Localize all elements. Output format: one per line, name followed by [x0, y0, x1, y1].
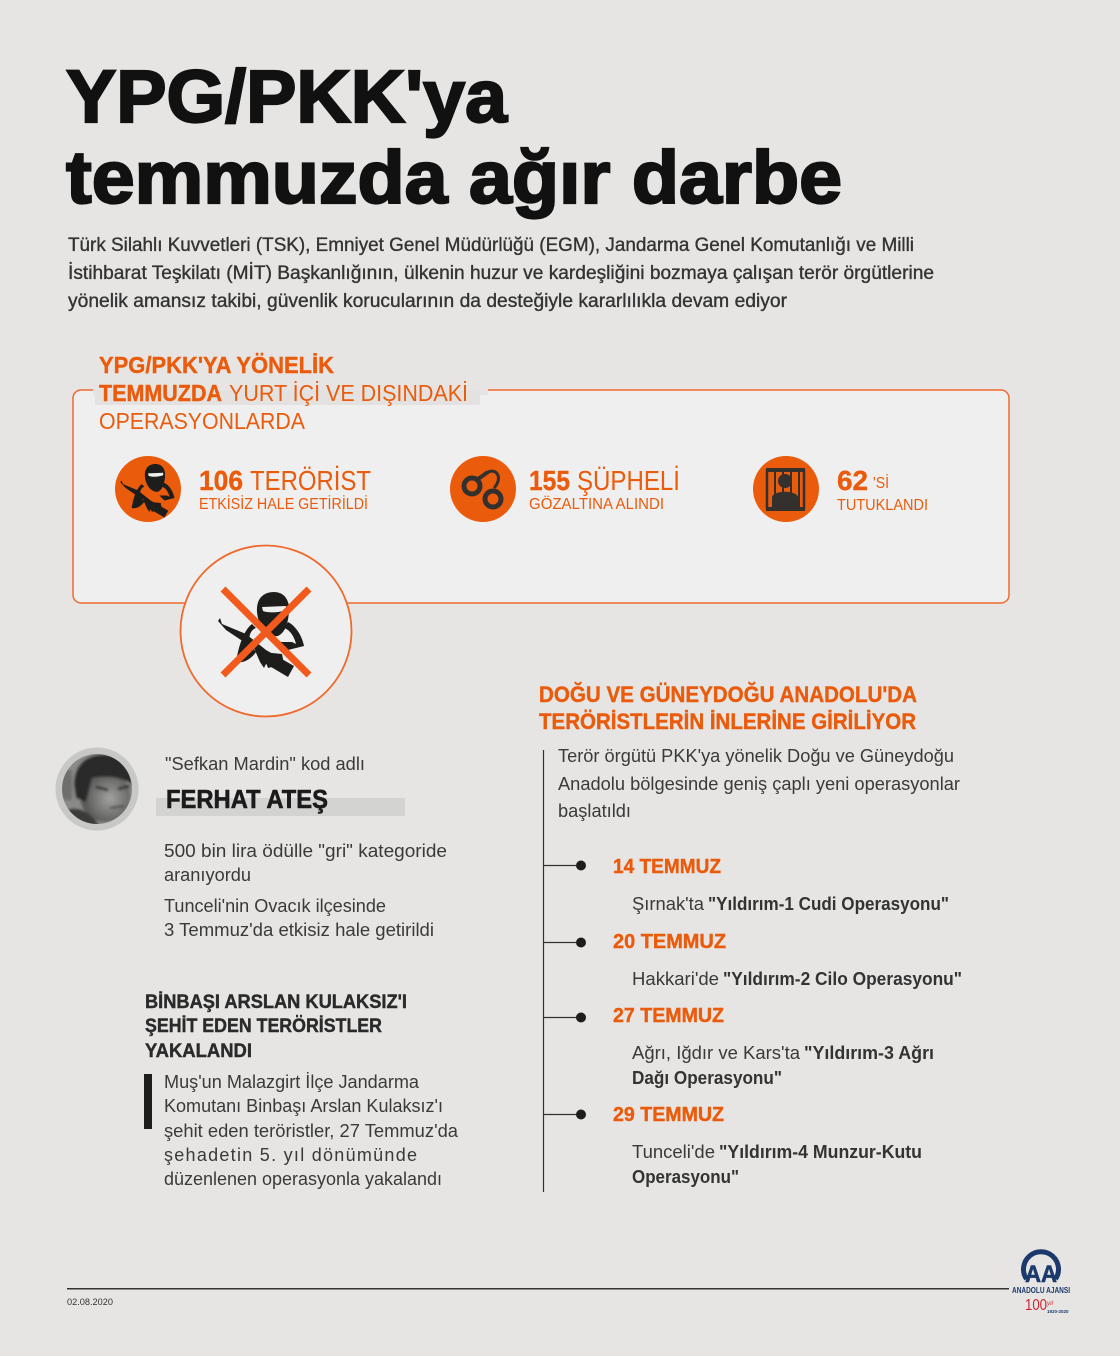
- heading: YAKALANDI: [145, 1041, 252, 1062]
- stat: 106 terrorists: TERÖRİST: [250, 465, 371, 496]
- intro text: [68, 235, 934, 312]
- entry: 29 Temmuz: [613, 1104, 922, 1187]
- title: YPG/PKK'ya: [66, 55, 508, 138]
- name with highlight bar: [156, 784, 405, 816]
- logo: Anadolu Ajansı: [1012, 1252, 1070, 1314]
- entry: 14 Temmuz: "Yıldırım-1 Cudi Operasyonu": [708, 894, 949, 914]
- intro text: İstihbarat Teşkilatı (MİT) Başkanlığının, ülkenin huzur ve kardeşliğini bozmaya çalışan terör örgütlerine: [68, 263, 934, 284]
- entry: 29 Temmuz: "Yıldırım-4 Munzur-Kutu: [719, 1142, 922, 1162]
- stat: 62 arrested: [837, 465, 928, 514]
- panel: Binbaşı Kulaksız: [144, 992, 459, 1189]
- date: 02.08.2020: [67, 1297, 113, 1307]
- entry: 20 Temmuz: [613, 931, 962, 989]
- body text: şehit eden teröristler, 27 Temmuz'da: [164, 1121, 459, 1141]
- entry: 20 Temmuz: Hakkari'de: [632, 969, 719, 989]
- logo: Anadolu Ajansı: 1920-2020: [1047, 1309, 1069, 1314]
- stat: 155 suspects: [529, 465, 680, 513]
- entry: 20 Temmuz: 20 TEMMUZ: [613, 931, 726, 953]
- entry: 29 Temmuz: 29 TEMMUZ: [613, 1104, 724, 1126]
- entry: 27 Temmuz: 27 TEMMUZ: [613, 1005, 724, 1027]
- title: [66, 55, 842, 219]
- alias label: "Sefkan Mardin" kod adlı: [165, 754, 365, 774]
- panel heading: YURT İÇİ VE DIŞINDAKİ: [229, 380, 468, 406]
- logo: Anadolu Ajansı: yıl: [1046, 1301, 1054, 1307]
- heading: [145, 992, 407, 1062]
- icon: handcuffs: [450, 456, 516, 522]
- stat: 106 terrorists: [199, 465, 371, 513]
- title: temmuzda ağır darbe: [66, 136, 842, 219]
- body text: şehadetin 5. yıl dönümünde: [164, 1145, 417, 1165]
- biography text: 3 Temmuz'da etkisiz hale getirildi: [164, 920, 434, 940]
- entry: 27 Temmuz: "Yıldırım-3 Ağrı: [804, 1043, 934, 1063]
- footer rule: [67, 1288, 1009, 1290]
- stat: 155 suspects: ŞÜPHELİ: [577, 465, 680, 496]
- panel: Ferhat Ateş: [56, 748, 447, 940]
- logo: Anadolu Ajansı: ANADOLU AJANSI: [1012, 1285, 1070, 1295]
- body text: [164, 1072, 459, 1189]
- panel heading: [99, 352, 468, 434]
- entry: 14 Temmuz: Şırnak'ta: [632, 894, 705, 914]
- panel heading: OPERASYONLARDA: [99, 408, 306, 434]
- intro text: Türk Silahlı Kuvvetleri (TSK), Emniyet Genel Müdürlüğü (EGM), Jandarma Genel Komutanlığı ve Milli: [68, 235, 914, 256]
- biography text: [164, 841, 447, 940]
- entry: 27 Temmuz: [613, 1005, 934, 1088]
- panel: Eastern operations: [539, 682, 962, 1192]
- intro text: Anadolu bölgesinde geniş çaplı yeni operasyonlar: [558, 774, 960, 794]
- panel heading: YPG/PKK'YA YÖNELİK: [99, 352, 334, 378]
- stat: 62 arrested: 'Sİ: [873, 473, 889, 492]
- heading: ŞEHİT EDEN TERÖRİSTLER: [145, 1016, 382, 1037]
- timeline: [543, 750, 962, 1192]
- intro text: Terör örgütü PKK'ya yönelik Doğu ve Güneydoğu: [558, 746, 954, 766]
- biography text: aranıyordu: [164, 865, 251, 885]
- stat: 106 terrorists: 106: [199, 465, 243, 496]
- entry: 27 Temmuz: Ağrı, Iğdır ve Kars'ta: [632, 1043, 801, 1063]
- body text: Muş'un Malazgirt İlçe Jandarma: [164, 1072, 420, 1092]
- body text: düzenlenen operasyonla yakalandı: [164, 1169, 442, 1189]
- logo: Anadolu Ajansı: 100: [1025, 1297, 1047, 1314]
- panel: operations: [73, 352, 1009, 603]
- entry: 14 Temmuz: 14 TEMMUZ: [613, 856, 721, 878]
- photo: Ferhat Ateş: [56, 748, 138, 830]
- heading: TERÖRİSTLERİN İNLERİNE GİRİLİYOR: [539, 709, 916, 734]
- biography text: 500 bin lira ödülle "gri" kategoride: [164, 841, 447, 861]
- logo: Anadolu Ajansı: AA: [1025, 1261, 1057, 1288]
- icon: prisoner behind bars: [753, 456, 819, 522]
- icon: fighter in orange circle: [115, 456, 181, 522]
- entry: 27 Temmuz: Dağı Operasyonu": [632, 1068, 782, 1088]
- intro text: yönelik amansız takibi, güvenlik korucularının da desteğiyle kararlılıkla devam ediyor: [68, 291, 788, 312]
- entry: 29 Temmuz: Operasyonu": [632, 1167, 739, 1187]
- stat: 106 terrorists: ETKİSİZ HALE GETİRİLDİ: [199, 494, 368, 513]
- stat: 62 arrested: 62: [837, 465, 868, 496]
- body text: Komutanı Binbaşı Arslan Kulaksız'ı: [164, 1096, 443, 1116]
- entry: 20 Temmuz: "Yıldırım-2 Cilo Operasyonu": [723, 969, 962, 989]
- panel heading: TEMMUZDA: [99, 380, 222, 406]
- stat: 155 suspects: GÖZALTINA ALINDI: [529, 495, 664, 513]
- icon: crossed-out fighter: [180, 546, 352, 716]
- entry: 14 Temmuz: [613, 856, 949, 914]
- intro text: [558, 746, 960, 821]
- entry: 29 Temmuz: Tunceli'de: [632, 1142, 715, 1162]
- heading: BİNBAŞI ARSLAN KULAKSIZ'I: [145, 992, 407, 1013]
- stat: 155 suspects: 155: [529, 465, 570, 496]
- stat: 62 arrested: TUTUKLANDI: [837, 497, 928, 514]
- biography text: Tunceli'nin Ovacık ilçesinde: [164, 896, 386, 916]
- heading: [539, 682, 917, 734]
- name with highlight bar: FERHAT ATEŞ: [166, 784, 328, 814]
- intro text: başlatıldı: [558, 801, 631, 821]
- heading: DOĞU VE GÜNEYDOĞU ANADOLU'DA: [539, 682, 917, 707]
